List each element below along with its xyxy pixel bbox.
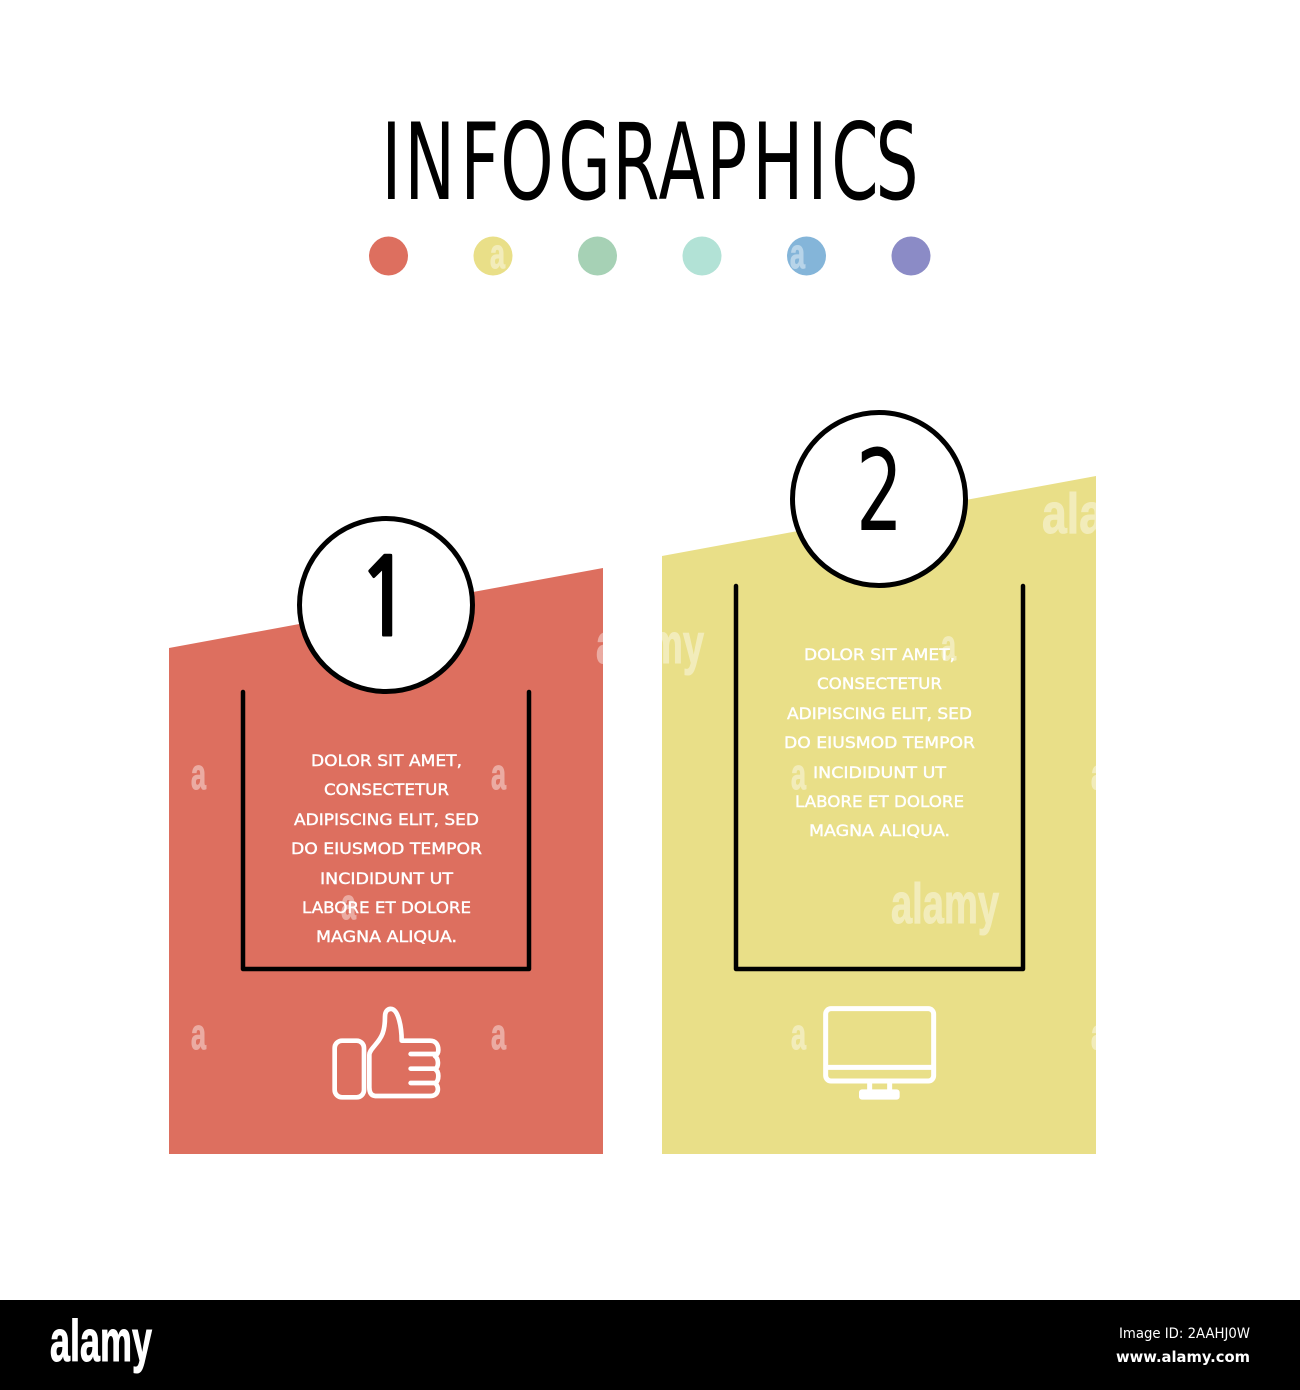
panel 2 text block bbox=[784, 645, 975, 840]
panel 2 background bbox=[662, 476, 1096, 1154]
watermarks: a bbox=[191, 750, 206, 799]
watermarks: a bbox=[791, 750, 806, 799]
watermarks: a bbox=[941, 621, 956, 670]
panel 2 text block: MAGNA ALIQUA. bbox=[809, 821, 950, 840]
footer image id: Image ID: 2AAHJ0W bbox=[1119, 1326, 1250, 1342]
panel 1 background bbox=[169, 568, 603, 1154]
footer url: www.alamy.com bbox=[1116, 1348, 1250, 1366]
watermarks bbox=[191, 230, 1106, 1059]
panel 2 number circle bbox=[792, 412, 966, 586]
panel 1 number circle: 1 bbox=[356, 545, 414, 653]
panel: step 2 bbox=[662, 412, 1096, 1154]
title: INFOGRAPHICS bbox=[381, 100, 919, 224]
watermarks: a bbox=[790, 230, 805, 277]
panel 1 number circle bbox=[300, 518, 472, 692]
watermarks: a bbox=[1091, 750, 1106, 799]
panel 1 bracket bbox=[243, 692, 529, 969]
panel 2 text block: LABORE ET DOLORE bbox=[795, 792, 964, 811]
footer logo: alamy bbox=[50, 1309, 152, 1374]
watermarks: alamy bbox=[596, 612, 704, 676]
panel 2 number circle: 2 bbox=[856, 427, 903, 557]
panel 1 text block: INCIDIDUNT UT bbox=[320, 869, 453, 888]
panel 1 text block: DOLOR SIT AMET, bbox=[311, 751, 462, 770]
watermarks: a bbox=[191, 1010, 206, 1059]
panel: step 1 bbox=[169, 518, 603, 1154]
icon: monitor bbox=[826, 1009, 934, 1100]
panel 2 text block: CONSECTETUR bbox=[817, 674, 942, 693]
watermarks: ala bbox=[1042, 482, 1105, 546]
watermarks: a bbox=[491, 750, 506, 799]
panel 2 text block: ADIPISCING ELIT, SED bbox=[787, 704, 972, 723]
colour dots row bbox=[369, 236, 930, 276]
watermarks: a bbox=[341, 880, 356, 929]
panel 2 text block: DOLOR SIT AMET, bbox=[804, 645, 955, 664]
panel 1 text block: ADIPISCING ELIT, SED bbox=[294, 810, 479, 829]
watermarks: a bbox=[1091, 1010, 1106, 1059]
panel 2 text block: DO EIUSMOD TEMPOR bbox=[784, 733, 975, 752]
panel 1 text block: MAGNA ALIQUA. bbox=[316, 927, 457, 946]
panel 1 text block: DO EIUSMOD TEMPOR bbox=[291, 839, 482, 858]
watermarks: a bbox=[490, 230, 505, 277]
watermarks: a bbox=[491, 1010, 506, 1059]
watermarks: alamy bbox=[891, 872, 999, 936]
panel 1 text block: CONSECTETUR bbox=[324, 780, 449, 799]
watermarks: a bbox=[791, 1010, 806, 1059]
icon: thumbs up bbox=[335, 1009, 438, 1097]
footer bar bbox=[0, 1300, 1300, 1390]
panel 2 bracket bbox=[736, 586, 1023, 969]
panel 1 text block bbox=[291, 751, 482, 946]
panel 2 text block: INCIDIDUNT UT bbox=[813, 763, 946, 782]
panel 1 text block: LABORE ET DOLORE bbox=[302, 898, 471, 917]
